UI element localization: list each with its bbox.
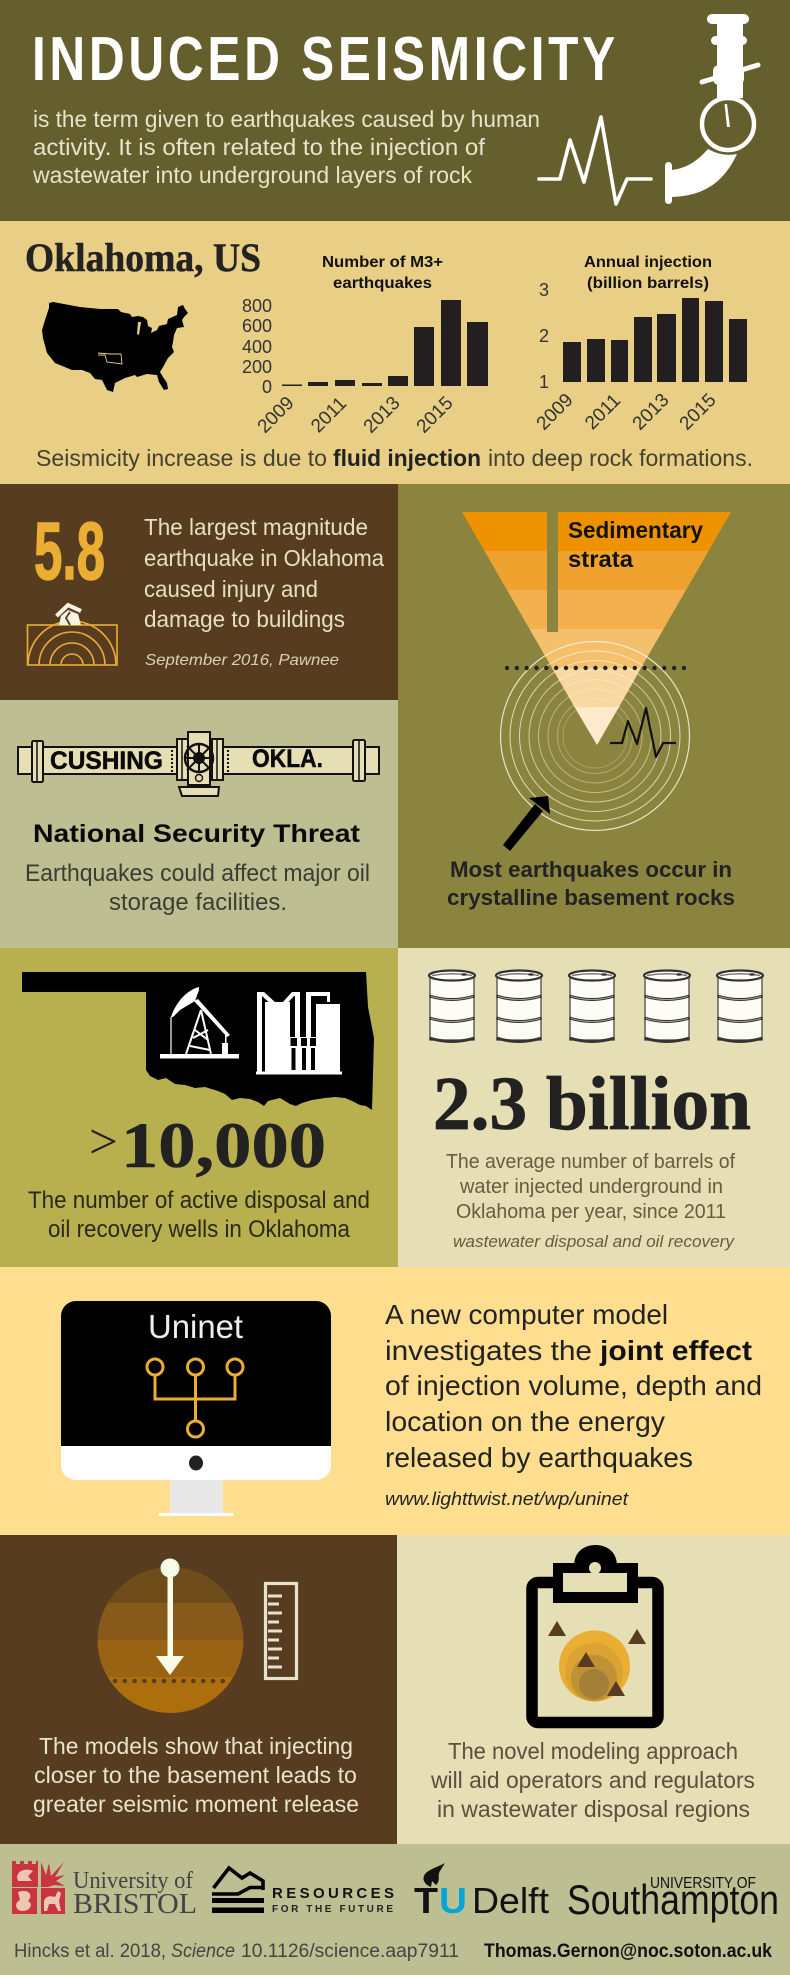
text: barrels description: The average number of barrels of — [446, 1151, 735, 1173]
text: barrels description: Oklahoma per year, since 2011 — [456, 1201, 726, 1223]
icon: pumpjack — [160, 987, 239, 1058]
chart: annual injection — [533, 254, 747, 434]
text: model description: investigates the — [385, 1335, 592, 1366]
panel: national security threat — [0, 700, 398, 948]
text: wells description: The number of active disposal and — [28, 1187, 370, 1214]
chart: number of M3+ earthquakes — [242, 254, 488, 437]
panel: active wells — [0, 948, 398, 1267]
intro text — [32, 106, 540, 188]
logo: University of Southampton: UNIVERSITY OF — [650, 1875, 756, 1892]
diagram: seismic wave rings — [500, 642, 690, 830]
logo: University of Bristol: University of — [73, 1868, 193, 1894]
text: earthquake description: earthquake in Oklahoma — [144, 545, 384, 571]
chart: annual injection: 2015 — [676, 390, 720, 434]
chart: number of M3+ earthquakes: 600 — [242, 316, 272, 336]
text: model description: of injection volume, depth and — [385, 1370, 762, 1401]
icon: Oklahoma state map — [22, 972, 374, 1110]
diagram: sedimentary strata wedge: strata — [568, 546, 633, 572]
stat: 2.3 billion: 2.3 billion — [433, 1062, 751, 1146]
contact email: Thomas.Gernon@noc.soton.ac.uk — [484, 1941, 772, 1962]
logo: Resources for the Future — [212, 1868, 394, 1915]
icon: seismograph trace — [610, 708, 676, 757]
caption — [36, 445, 753, 471]
text: storage facilities: Earthquakes could affect major oil — [25, 860, 370, 887]
chart: number of M3+ earthquakes: 2013 — [360, 393, 404, 437]
heading: National Security Threat — [33, 820, 361, 848]
heading: Oklahoma, US — [25, 235, 261, 280]
text: models finding — [33, 1733, 359, 1817]
diagram: boundary dotted line — [507, 666, 684, 670]
logo: University of Bristol — [12, 1861, 197, 1920]
arrow — [503, 796, 550, 851]
text: models finding: closer to the basement leads to — [34, 1762, 357, 1788]
chart: number of M3+ earthquakes: 800 — [242, 296, 272, 316]
chart: annual injection: 2 — [539, 326, 549, 346]
caption: fluid injection — [333, 445, 481, 471]
panel: basement rocks diagram — [398, 484, 790, 948]
diagram: sedimentary strata wedge: Sedimentary — [568, 517, 703, 543]
chart: number of M3+ earthquakes: 400 — [242, 337, 272, 357]
text: model description: released by earthquakes — [385, 1442, 693, 1473]
text: storage facilities — [25, 860, 370, 916]
text: models finding: The models show that injecting — [39, 1733, 353, 1759]
text: model description: joint effect — [599, 1335, 752, 1366]
chart: annual injection: Annual injection — [584, 254, 712, 271]
chart: number of M3+ earthquakes: 200 — [242, 357, 272, 377]
icon: seismograph trace — [539, 117, 651, 204]
text: crystalline basement: crystalline basement rocks — [447, 885, 735, 910]
text: earthquake description: caused injury and — [144, 576, 318, 602]
diagram: sedimentary strata wedge — [462, 512, 731, 745]
icon: row of barrels — [429, 970, 763, 1042]
text: note: wastewater disposal and oil recovery — [453, 1232, 736, 1251]
chart: annual injection: 2011 — [581, 390, 625, 434]
chart: annual injection: 3 — [539, 280, 549, 300]
panel: 2.3 billion barrels — [398, 948, 790, 1267]
panel: Uninet computer model — [0, 1267, 790, 1535]
chart: number of M3+ earthquakes: 2009 — [254, 393, 298, 437]
intro text: wastewater into underground layers of rock — [32, 162, 472, 188]
logo: TU Delft: Delft — [472, 1880, 549, 1921]
chart: annual injection: 2009 — [533, 390, 577, 434]
text: barrels description — [446, 1151, 735, 1223]
text: barrels description: water injected underground in — [459, 1176, 723, 1198]
text: storage facilities: storage facilities. — [109, 889, 287, 916]
text: earthquake description — [144, 514, 384, 632]
panel: largest earthquake — [0, 484, 398, 700]
text: wells description — [28, 1187, 370, 1243]
logo: TU Delft: U — [439, 1880, 467, 1921]
text: approach description: The novel modeling approach — [448, 1738, 738, 1764]
panel: footer — [0, 1844, 790, 1975]
text: approach description — [430, 1738, 755, 1822]
logo: TU Delft — [414, 1863, 549, 1921]
text: date and place: September 2016, Pawnee — [145, 652, 339, 669]
text: models finding: greater seismic moment release — [33, 1791, 359, 1817]
text: model description: location on the energy — [385, 1406, 665, 1437]
intro text: activity. It is often related to the injection of — [33, 134, 486, 160]
chart: annual injection: (billion barrels) — [587, 275, 709, 292]
icon: computer monitor: Uninet — [148, 1308, 243, 1345]
icon: pipe with gauge — [665, 14, 758, 204]
logo: Resources for the Future: RESOURCES — [272, 1885, 394, 1902]
caption: Seismicity increase is due to — [36, 445, 327, 471]
citation — [14, 1941, 459, 1962]
text: crystalline basement: Most earthquakes occur in — [450, 857, 732, 882]
stat: more than 10,000: > — [89, 1113, 118, 1169]
icon: damaged house over seismic waves — [28, 605, 117, 665]
text: model description: A new computer model — [385, 1299, 668, 1330]
text: approach description: will aid operators and regulators — [430, 1767, 755, 1793]
intro text: is the term given to earthquakes caused by human — [33, 106, 540, 132]
logo: Resources for the Future: FOR THE FUTURE — [272, 1904, 393, 1915]
icon: computer monitor — [61, 1301, 331, 1516]
icon: refinery — [256, 992, 342, 1074]
caption: into deep rock formations. — [488, 445, 753, 471]
icon: US map — [42, 302, 188, 392]
panel: header — [0, 0, 790, 221]
stat: more than 10,000: 10,000 — [121, 1110, 326, 1182]
icon: Cushing pipeline: OKLA. — [252, 745, 323, 773]
diagram: strata circle with injection arrow — [98, 1558, 244, 1713]
logo: University of Bristol: BRISTOL — [73, 1888, 197, 1920]
logo: TU Delft: T — [414, 1880, 438, 1921]
stat: magnitude 5.8: 5.8 — [34, 506, 105, 597]
title: INDUCED SEISMICITY — [32, 24, 615, 93]
citation: 10.1126/science.aap7911 — [241, 1941, 459, 1962]
chart: annual injection: 2013 — [629, 390, 673, 434]
chart: number of M3+ earthquakes: 2015 — [413, 393, 457, 437]
panel: injection depth — [0, 1535, 397, 1844]
icon: Cushing pipeline: CUSHING — [50, 747, 163, 775]
text: url: www.lighttwist.net/wp/uninet — [385, 1489, 629, 1509]
text: approach description: in wastewater disposal regions — [437, 1796, 750, 1822]
text: wells description: oil recovery wells in Oklahoma — [48, 1216, 351, 1243]
chart: annual injection: 1 — [539, 372, 549, 392]
icon: ruler — [266, 1584, 296, 1678]
text: crystalline basement — [447, 857, 735, 910]
panel: Oklahoma, US — [0, 221, 790, 484]
citation: Science — [171, 1941, 235, 1962]
panel: modeling approach — [397, 1535, 790, 1844]
chart: number of M3+ earthquakes: Number of M3+ — [322, 254, 443, 271]
text: model description — [385, 1299, 762, 1473]
chart: number of M3+ earthquakes: 0 — [262, 377, 272, 397]
icon: Cushing pipeline — [18, 732, 379, 796]
chart: number of M3+ earthquakes: earthquakes — [333, 275, 432, 292]
citation: Hincks et al. 2018, — [14, 1941, 166, 1962]
icon: clipboard with map — [532, 1545, 658, 1722]
chart: number of M3+ earthquakes: 2011 — [307, 393, 351, 437]
text: earthquake description: The largest magnitude — [144, 514, 368, 540]
text: earthquake description: damage to buildings — [144, 606, 345, 632]
